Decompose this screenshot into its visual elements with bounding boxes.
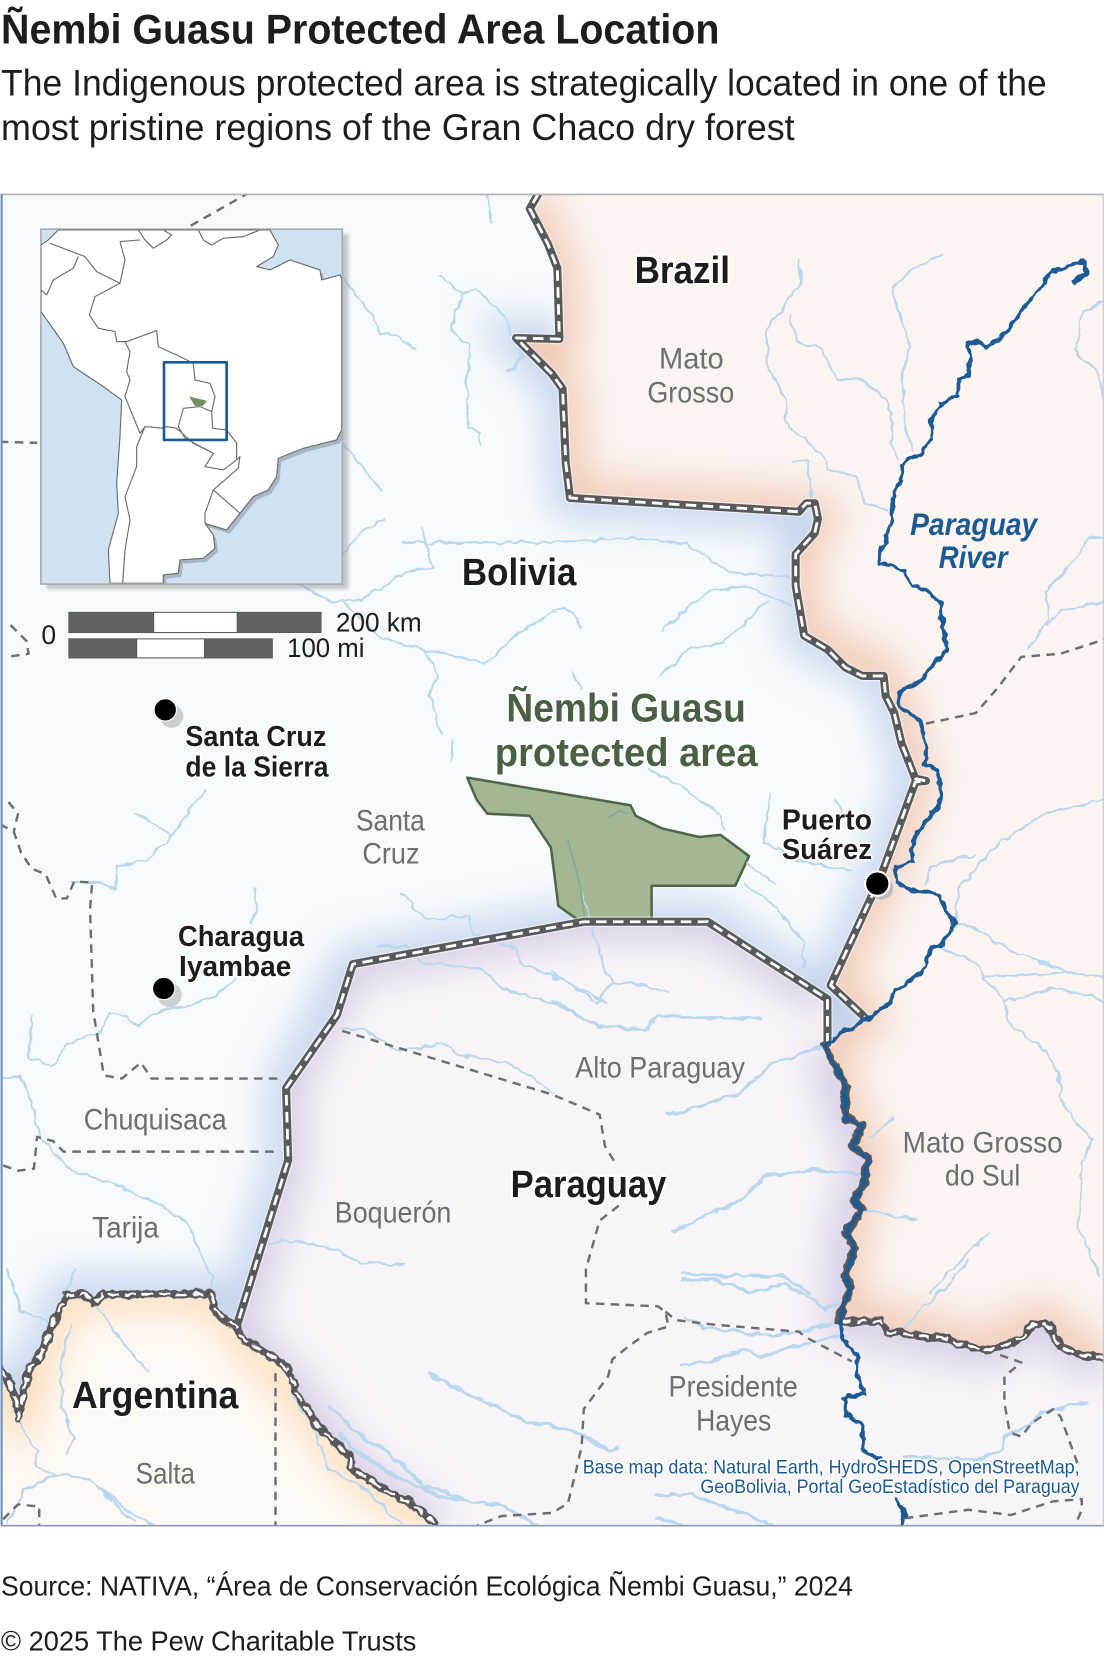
labels: departments and states: Chuquisaca bbox=[84, 1103, 227, 1136]
marker: Puerto Suárez bbox=[782, 805, 893, 899]
labels: departments and states: Hayes bbox=[696, 1404, 771, 1437]
marker: Puerto Suárez: Suárez bbox=[782, 834, 872, 866]
label: Paraguay River bbox=[910, 514, 1038, 568]
Paraguay River bbox=[825, 262, 1087, 1526]
title: Ñembi Guasu Protected Area Location bbox=[1, 6, 719, 52]
marker: Puerto Suárez: Puerto bbox=[782, 805, 872, 837]
rivers inside protected area bbox=[568, 810, 628, 920]
label: Paraguay River: River bbox=[939, 539, 1009, 575]
labels: departments and states: do Sul bbox=[945, 1160, 1020, 1193]
marker: Santa Cruz de la Sierra: Santa Cruz bbox=[185, 721, 326, 753]
region: Brazil bbox=[509, 194, 1104, 1370]
region: Bolivia bbox=[2, 196, 912, 1396]
base map credit bbox=[583, 1458, 1080, 1498]
label: Paraguay: Paraguay bbox=[511, 1163, 666, 1206]
scale bar bbox=[42, 612, 420, 658]
scale bar: 100 mi bbox=[287, 633, 364, 663]
labels: departments and states: Grosso bbox=[647, 377, 734, 410]
labels: departments and states: Mato bbox=[659, 343, 724, 376]
inset locator map bbox=[41, 229, 349, 589]
label: Ñembi Guasu protected area: protected area bbox=[495, 730, 758, 775]
marker: Santa Cruz de la Sierra bbox=[154, 699, 329, 784]
labels: departments and states: Cruz bbox=[362, 837, 420, 870]
scale bar: 200 km bbox=[336, 607, 422, 637]
labels: departments and states: Salta bbox=[136, 1457, 195, 1490]
label: Ñembi Guasu protected area: Ñembi Guasu bbox=[506, 685, 746, 731]
copyright: © 2025 The Pew Charitable Trusts bbox=[1, 1626, 416, 1657]
label: Ñembi Guasu protected area bbox=[495, 685, 758, 775]
base map credit: GeoBolivia, Portal GeoEstadístico del Paraguay bbox=[700, 1477, 1080, 1498]
marker: Charagua Iyambae bbox=[153, 921, 305, 1007]
labels: departments and states: Presidente bbox=[669, 1370, 798, 1403]
subtitle: The Indigenous protected area is strategically located in one of the bbox=[1, 61, 1047, 103]
labels: departments and states bbox=[84, 343, 1063, 1490]
base map credit: Base map data: Natural Earth, HydroSHEDS, OpenStreetMap, bbox=[583, 1458, 1080, 1479]
label: Argentina: Argentina bbox=[72, 1374, 239, 1417]
subtitle: most pristine regions of the Gran Chaco dry forest bbox=[1, 106, 795, 148]
source note: Source: NATIVA, “Área de Conservación Ecológica Ñembi Guasu,” 2024 bbox=[1, 1571, 853, 1602]
region: Argentina bbox=[2, 1296, 432, 1525]
international borders: straight sections bbox=[236, 194, 926, 1328]
scale bar: 0 bbox=[41, 620, 56, 650]
labels: departments and states: Boquerón bbox=[335, 1197, 451, 1230]
marker: Santa Cruz de la Sierra: de la Sierra bbox=[185, 752, 329, 784]
label: Bolivia: Bolivia bbox=[462, 551, 577, 594]
label: Paraguay River: Paraguay bbox=[910, 506, 1038, 542]
light tributary rivers bbox=[3, 194, 1104, 1526]
region: Paraguay bbox=[212, 911, 1104, 1531]
marker: Charagua Iyambae: Charagua bbox=[178, 921, 305, 953]
international borders: meandering sections bbox=[0, 262, 1104, 1526]
protected area polygon bbox=[467, 778, 749, 922]
subtitle bbox=[1, 61, 1047, 148]
marker: Charagua Iyambae: Iyambae bbox=[179, 951, 291, 983]
labels: departments and states: Tarija bbox=[92, 1211, 159, 1244]
label: Brazil: Brazil bbox=[635, 249, 730, 292]
labels: departments and states: Mato Grosso bbox=[903, 1127, 1063, 1160]
labels: departments and states: Alto Paraguay bbox=[575, 1051, 745, 1084]
labels: departments and states: Santa bbox=[356, 805, 425, 838]
